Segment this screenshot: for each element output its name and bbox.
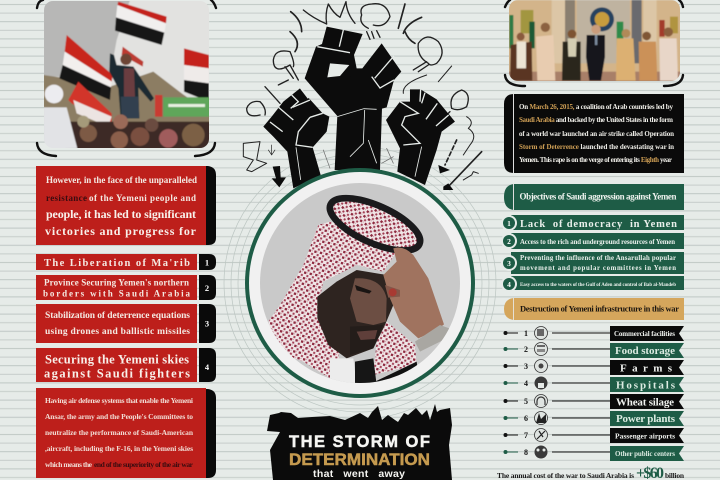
objective 4 (501, 276, 684, 292)
protester (109, 53, 154, 118)
title block: DETERMINATION (289, 451, 430, 469)
panel: resistance intro: However, in the face of the unparalleled (46, 175, 197, 185)
list row 5: 5 (524, 397, 528, 406)
annual cost note: billion (665, 471, 685, 480)
list row 3 (504, 360, 684, 375)
list row 8 (504, 446, 684, 461)
objective 3: Preventing the influence of the Ansarullah popular (520, 255, 676, 262)
portrait medallion (245, 168, 475, 398)
list row 7 (504, 428, 684, 443)
photo corner brackets (505, 0, 683, 86)
objective 1: 1 (507, 219, 511, 228)
list row 7: Passenger airports (615, 432, 675, 440)
panel: air defense: Ansar, the army and the People's Committees to (45, 412, 193, 421)
panel: background of the war (504, 94, 684, 173)
list row 6 (504, 411, 684, 426)
list row 2: 2 (524, 345, 528, 354)
list item 4: Yemeni skies: against Saudi fighters (44, 366, 190, 380)
objective 4: 4 (507, 280, 511, 289)
list row 5 (504, 394, 684, 409)
list item 4: Yemeni skies: Securing the Yemeni skies (45, 352, 189, 366)
list row 3: 3 (524, 362, 528, 371)
panel: air defense: end of the superiority of the air war (94, 460, 194, 469)
title block: that went away (313, 468, 405, 480)
list row 4 (504, 376, 684, 392)
panel: background of the war: Saudi Arabia and backed by the United States in the form (519, 116, 673, 124)
list row 6: Power plants (616, 413, 676, 425)
list item 2: northern borders: borders with Saudi Arabia (43, 288, 190, 298)
panel: air defense (36, 388, 216, 478)
panel: resistance intro: victories and progress for (45, 224, 197, 238)
list item 4: Yemeni skies: 4 (205, 362, 210, 372)
objective 3: movement and popular committees in Yemen (520, 265, 676, 272)
concentric rings around portrait (224, 147, 496, 419)
list row 5: Wheat silage (616, 396, 674, 408)
doodles around fists (243, 2, 482, 188)
panel: resistance intro: people, it has led to significant (46, 207, 196, 221)
list row 2: Food storage (615, 345, 675, 357)
panel: resistance intro (36, 166, 216, 245)
hand (383, 247, 444, 338)
panel: air defense: Having air defense systems that enable the Yemeni (45, 396, 193, 405)
panel: air defense: neutralize the performance of Saudi-American (45, 428, 194, 437)
objective 3: 3 (507, 259, 511, 268)
title block: THE STORM OF (289, 433, 430, 451)
left fist (263, 88, 329, 188)
face (317, 270, 393, 358)
annual cost note (497, 465, 685, 480)
photo: Gulf summit (505, 0, 683, 86)
heading: destruction: Destruction of Yemeni infrastructure in this war (520, 304, 679, 314)
list row 4: 4 (524, 379, 528, 388)
list item 2: northern borders: Province Securing Yemen's northern (44, 278, 189, 288)
list item 1: Marib: 1 (205, 258, 209, 268)
heading: destruction (504, 298, 684, 320)
panel: air defense: which means the (45, 460, 93, 469)
objective 2: Access to the rich and underground resources of Yemen (520, 239, 675, 246)
panel: background of the war: Yemen. This rape is on the verge of entering its Eighth year (519, 156, 672, 164)
list item 3: deterrence equations (36, 304, 216, 343)
arrows (272, 166, 286, 187)
list item 2: northern borders: 2 (205, 283, 209, 293)
list row 1: Commercial facilities (614, 330, 675, 338)
banner (163, 97, 210, 117)
panel: resistance intro: of the Yemeni people and (89, 193, 196, 203)
objective 1 (501, 215, 684, 231)
list row 1: 1 (524, 329, 528, 338)
panel: background of the war: On March 26, 2015, a coalition of Arab countries led by (519, 103, 674, 111)
watch (415, 325, 449, 352)
list item 1: Marib: The Liberation of Ma'rib (44, 258, 190, 269)
objective 2: 2 (507, 237, 511, 246)
photo: crowd with Yemeni flags (37, 0, 216, 156)
list row 7: 7 (524, 431, 528, 440)
list item 3: deterrence equations: Stabilization of deterrence equations (45, 311, 190, 321)
list row 3: Farms (620, 362, 673, 374)
title block (267, 404, 452, 480)
objective 2 (501, 233, 684, 249)
crowd (70, 121, 209, 148)
list item 4: Yemeni skies (36, 348, 216, 382)
headscarf (268, 222, 397, 378)
panel: air defense: ,aircraft, including the F-16, in the Yemeni skies (45, 444, 193, 453)
list row 8: Other public centers (615, 450, 675, 458)
list item 2: northern borders (36, 275, 216, 300)
ink splash backing (267, 404, 452, 480)
agal crown (333, 202, 417, 248)
list row 4: Hospitals (616, 380, 676, 392)
list item 3: deterrence equations: 3 (205, 318, 209, 328)
icon: raised fists (263, 27, 455, 190)
panel: resistance intro: resistance (46, 193, 87, 203)
panel: background of the war: of a world war launched an air strike called Operation (519, 130, 674, 138)
right fist (386, 89, 455, 185)
figures (510, 42, 532, 81)
clothing (330, 358, 355, 383)
annual cost note: The annual cost of the war to Saudi Arabia is (497, 471, 634, 480)
list row 6: 6 (524, 414, 528, 423)
objective 4: Easy access to the waters of the Gulf of Aden and control of Bab al-Mandeb (520, 283, 676, 288)
center fist (305, 27, 401, 170)
list item 3: deterrence equations: using drones and ballistic missiles (45, 327, 190, 337)
list row 2 (504, 342, 684, 358)
heading: objectives: Objectives of Saudi aggression against Yemen (520, 192, 676, 202)
photo corner brackets (37, 0, 216, 156)
objective 3 (501, 252, 684, 274)
list row 1 (504, 326, 684, 341)
list row 8: 8 (524, 448, 528, 457)
list item 1: Marib (36, 254, 216, 270)
heading: objectives (504, 184, 684, 210)
objective 1: Lack of democracy in Yemen (520, 219, 677, 230)
panel: background of the war: Storm of Deterrence launched the devastating war in (519, 143, 674, 151)
